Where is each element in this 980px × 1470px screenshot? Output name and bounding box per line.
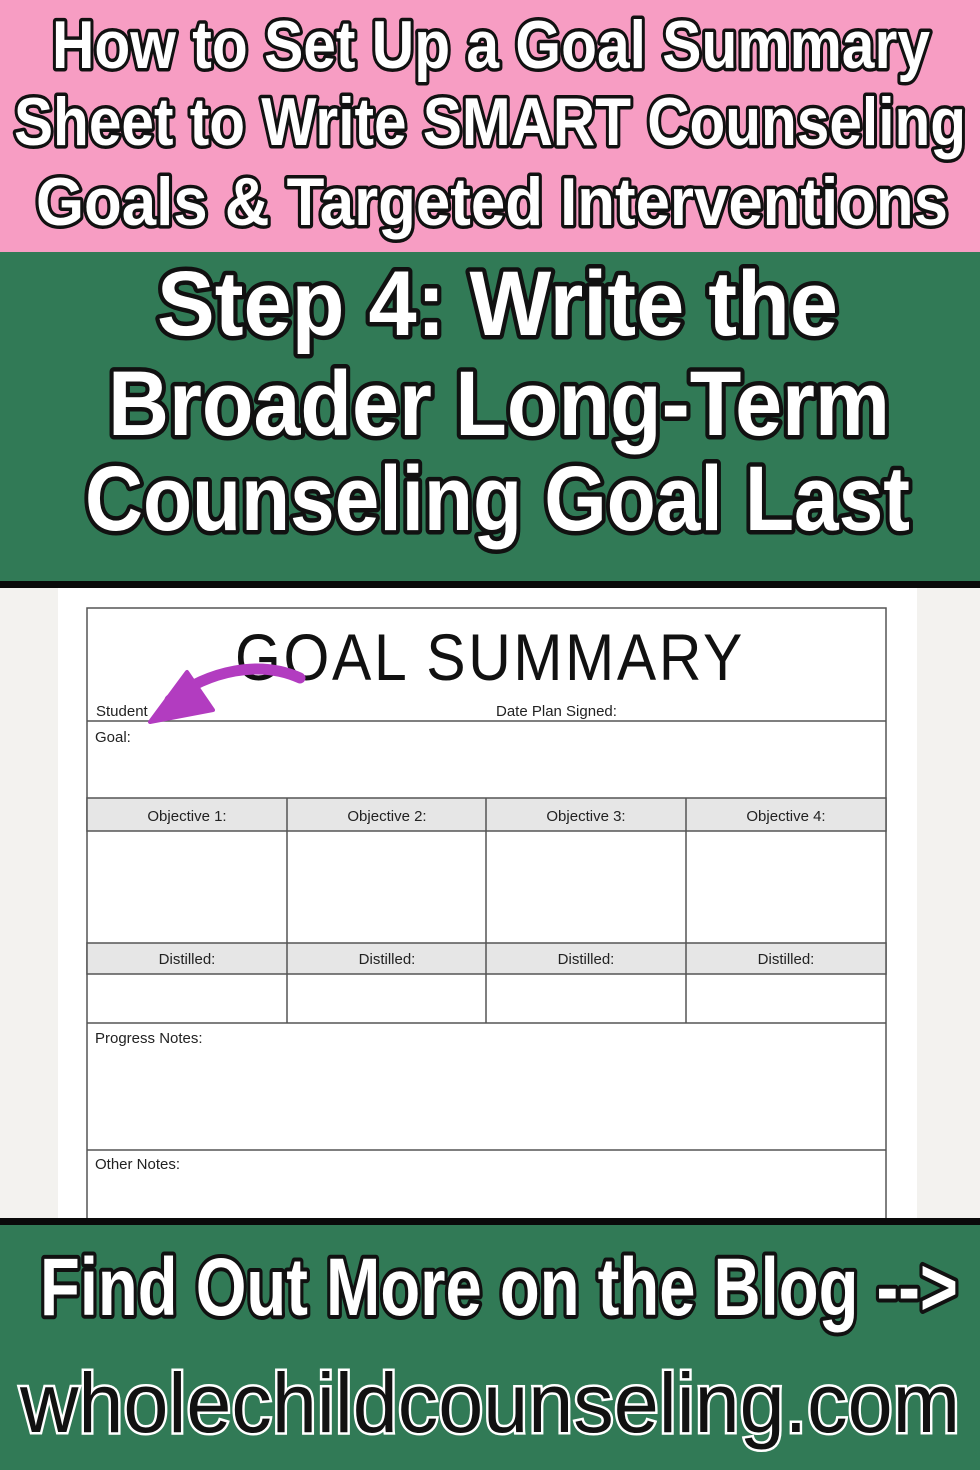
step heading bbox=[85, 253, 910, 550]
header panel: pink title band bbox=[0, 0, 980, 252]
form labels: Distilled: bbox=[758, 951, 814, 968]
form labels: Objective 3: bbox=[546, 808, 626, 825]
form labels: Distilled: bbox=[359, 951, 415, 968]
form labels: Student bbox=[96, 703, 149, 720]
form labels: Goal: bbox=[95, 729, 131, 746]
form labels: Objective 2: bbox=[347, 808, 427, 825]
step heading: Broader Long-Term bbox=[108, 353, 890, 455]
form labels: Distilled: bbox=[558, 951, 614, 968]
form table bbox=[87, 608, 886, 1228]
form labels bbox=[95, 703, 826, 1173]
image panel: goal summary sheet bbox=[0, 588, 980, 1228]
step heading: Step 4: Write the bbox=[157, 253, 838, 355]
form labels: Date Plan Signed: bbox=[496, 703, 617, 720]
form labels: Distilled: bbox=[159, 951, 215, 968]
step panel: green band bbox=[0, 252, 980, 582]
form labels: Objective 4: bbox=[746, 808, 826, 825]
arrow: purple curved arrow pointing to student line bbox=[150, 669, 300, 722]
form title: GOAL SUMMARY bbox=[235, 620, 745, 694]
form labels: Objective 1: bbox=[147, 808, 227, 825]
title bbox=[14, 7, 966, 240]
footer panel: green call to action bbox=[0, 1225, 980, 1470]
footer text: website: wholechildcounseling.com bbox=[19, 1356, 960, 1450]
form labels: Progress Notes: bbox=[95, 1030, 203, 1047]
form labels: Other Notes: bbox=[95, 1156, 180, 1173]
